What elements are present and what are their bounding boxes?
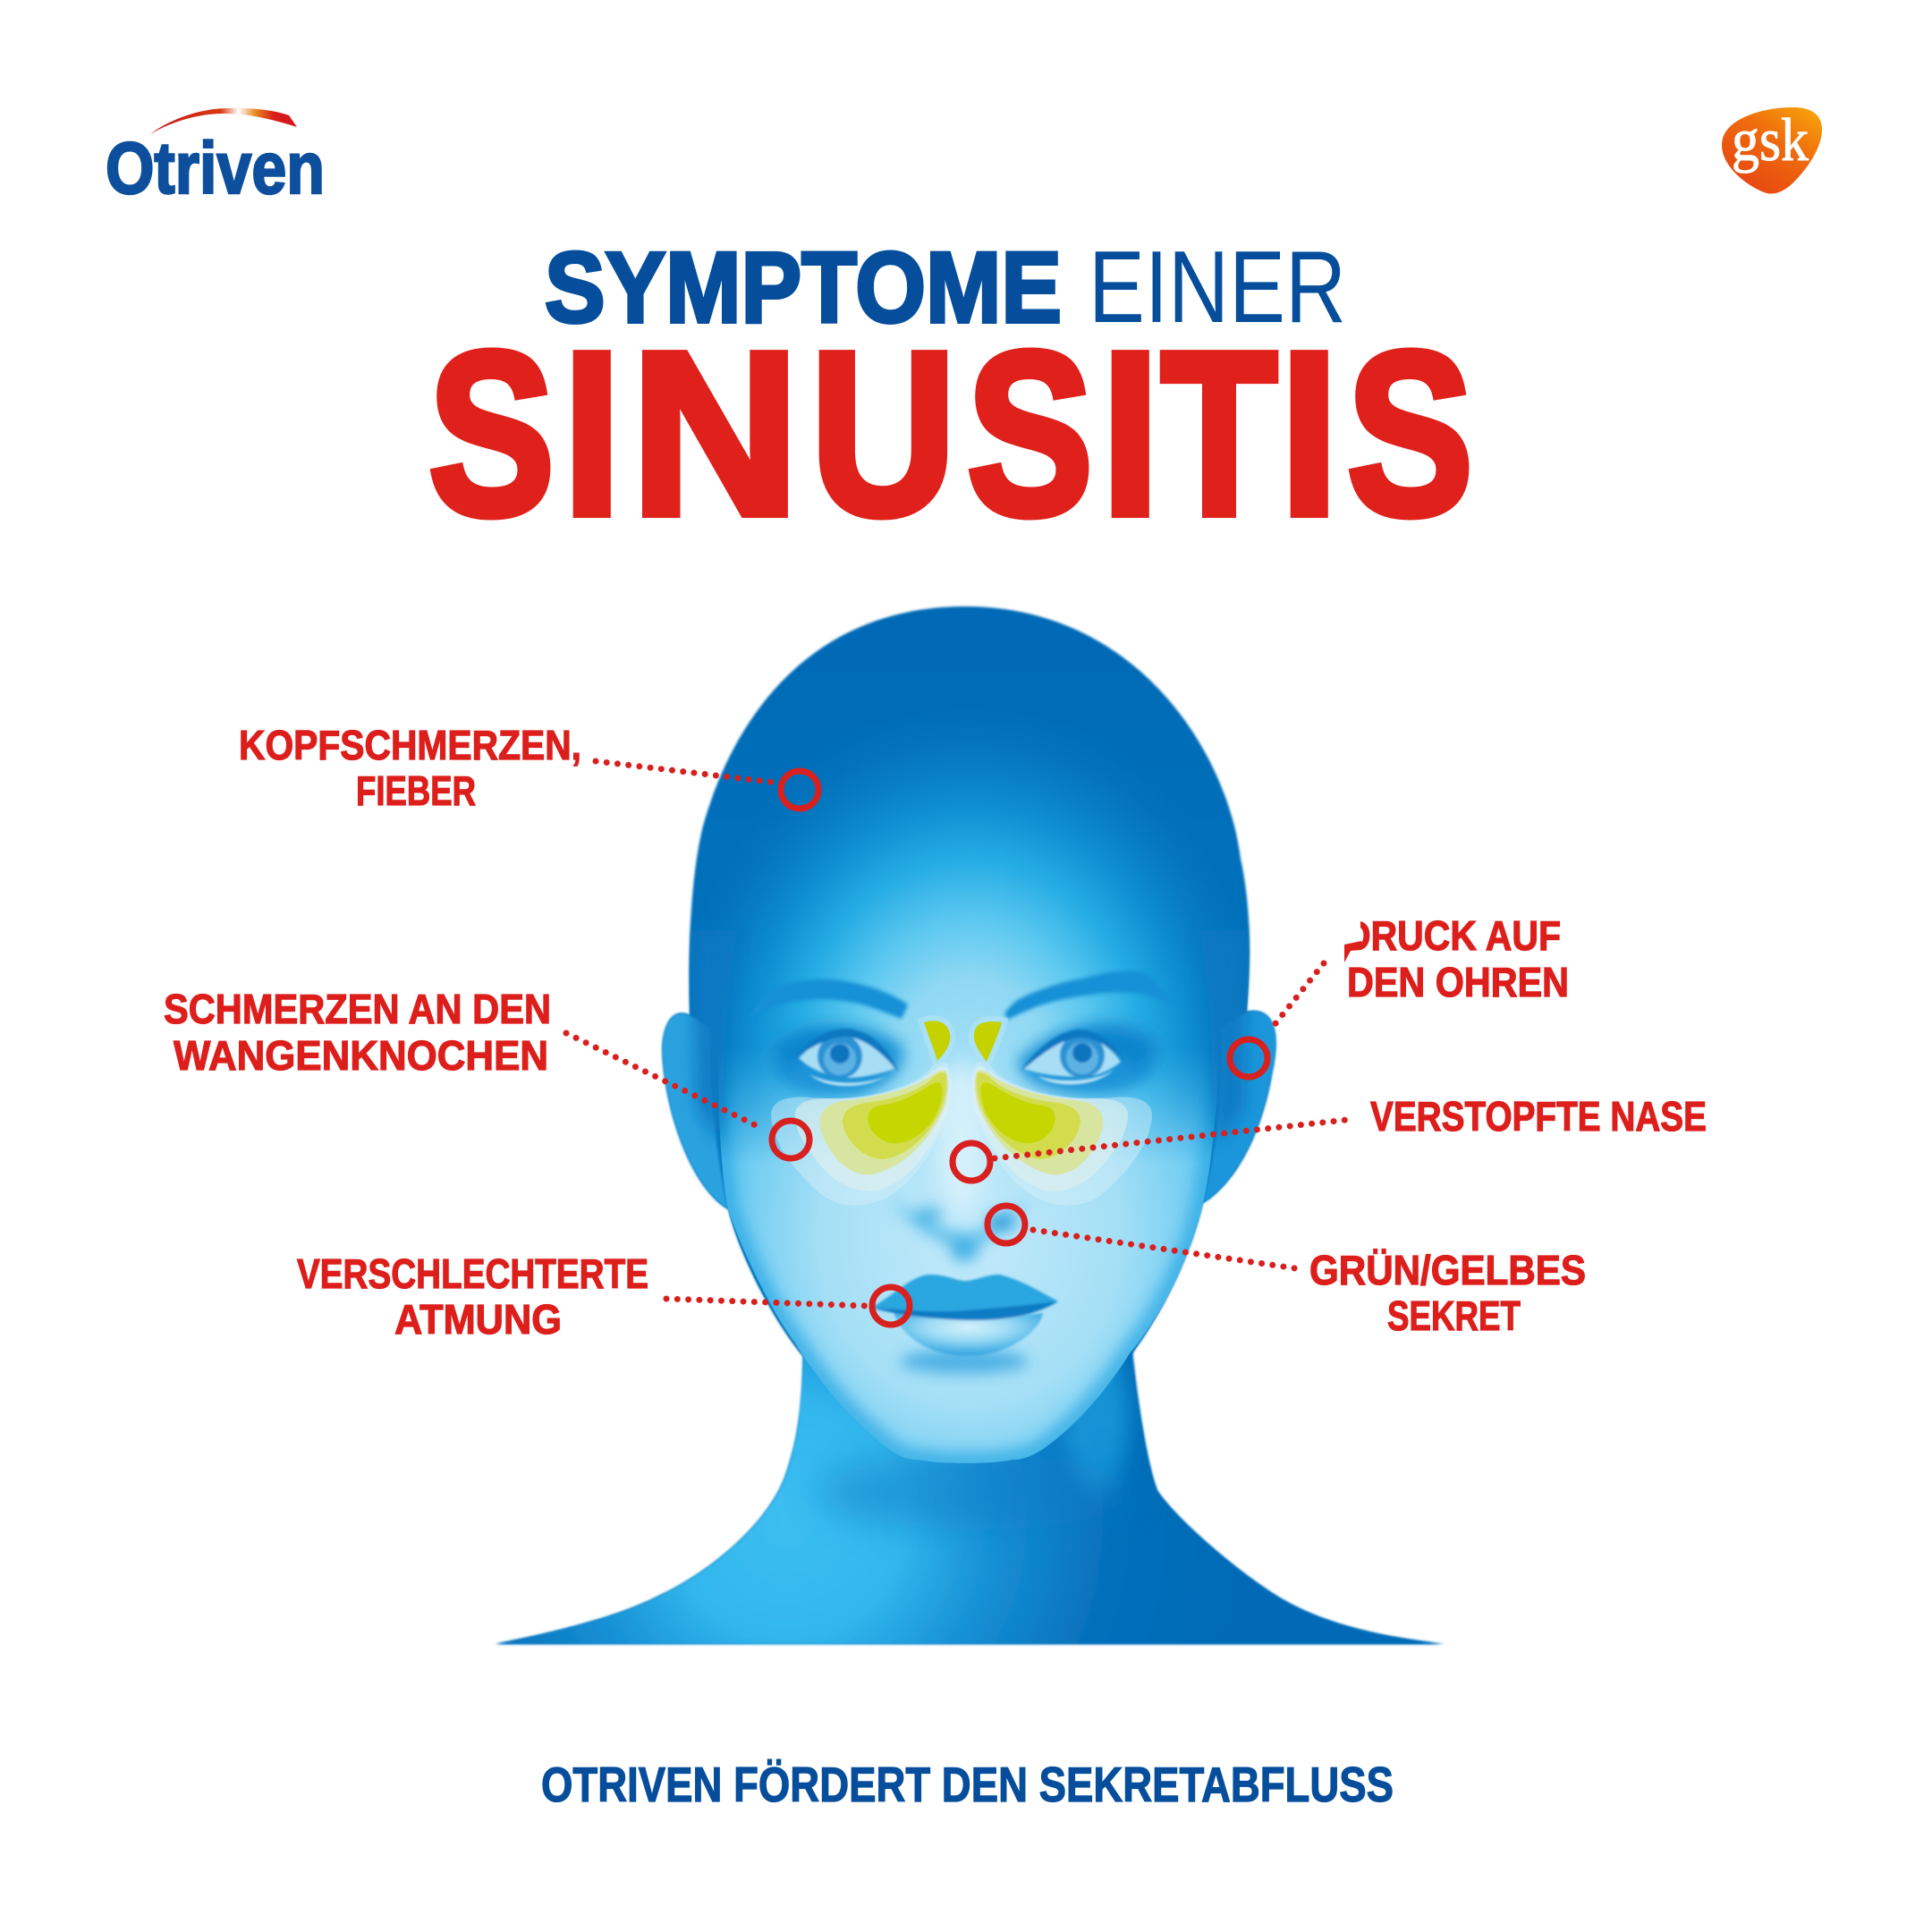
- callout: Schmerzen an den Wangenknochen: SCHMERZEN AN DEN: [164, 986, 551, 1032]
- logo: gsk: gsk: [1732, 106, 1809, 174]
- eye shadow left: [765, 1024, 903, 1096]
- lips: [871, 1275, 1058, 1356]
- title: Sinusitis: T: [1161, 304, 1277, 564]
- shadow below lower lip: [900, 1349, 1029, 1374]
- temple shade left: [687, 925, 726, 1141]
- title: Sinusitis: I: [1101, 304, 1159, 564]
- callout: Kopfschmerzen, Fieber: [239, 722, 818, 814]
- neck and shoulders: [496, 1324, 1444, 1644]
- title: Symptome einer: EINER: [1089, 231, 1346, 344]
- sinuses right: [970, 1062, 1152, 1206]
- callout: Verschlechterte Atmung: ATMUNG: [394, 1296, 562, 1343]
- title: Sinusitis: I: [1280, 304, 1338, 564]
- callout: Schmerzen an den Wangenknochen: [164, 986, 809, 1158]
- title: Sinusitis: I: [563, 304, 621, 564]
- callout: Druck auf den Ohren: DEN OHREN: [1347, 959, 1569, 1005]
- temple shade right: [1210, 926, 1252, 1139]
- logo: Otriven: Otriven: [106, 128, 325, 209]
- callout: Verschlechterte Atmung: [297, 1250, 910, 1343]
- right ear: [1203, 1011, 1275, 1203]
- right neck light: [1063, 1342, 1128, 1494]
- left eye: [794, 1029, 898, 1086]
- callout: Grün/gelbes Sekret: [987, 1206, 1586, 1339]
- right eye: [1021, 1030, 1125, 1084]
- left ear: [663, 1013, 728, 1209]
- callout: Druck auf den Ohren: DRUCK AUF: [1344, 912, 1561, 959]
- eye shadow right: [1018, 1021, 1165, 1095]
- sinuses left: [771, 1062, 953, 1206]
- right eyebrow: [1004, 971, 1171, 1020]
- lower face skin: [719, 1061, 1216, 1463]
- title: Sinusitis: U: [810, 304, 956, 564]
- frontal sinus right: [974, 1021, 1002, 1062]
- illustration: blue head and neck: [496, 606, 1444, 1644]
- frontal sinus left: [924, 1021, 950, 1061]
- nose shadow: [893, 1194, 1027, 1261]
- callout: Verstopfte Nase: VERSTOPFTE NASE: [1370, 1093, 1707, 1140]
- callout: Grün/gelbes Sekret: GRÜN/GELBES: [1309, 1247, 1586, 1293]
- callout: Kopfschmerzen, Fieber: KOPFSCHMERZEN,: [239, 722, 581, 768]
- title: Symptome einer: SYMPTOME: [545, 232, 1062, 343]
- logo: gsk: [1722, 106, 1822, 194]
- title: Sinusitis: S: [1347, 304, 1473, 564]
- callout: Verstopfte Nase: [953, 1093, 1707, 1181]
- head silhouette: [496, 606, 1444, 1644]
- title: Sinusitis: N: [631, 304, 800, 564]
- callout: Schmerzen an den Wangenknochen: WANGENKNOCHEN: [174, 1032, 548, 1079]
- footer claim: OTRIVEN FÖRDERT DEN SEKRETABFLUSS: [541, 1757, 1394, 1812]
- callout: Druck auf den Ohren: [1230, 912, 1569, 1077]
- callout: Grün/gelbes Sekret: SEKRET: [1387, 1292, 1521, 1339]
- callout: Verschlechterte Atmung: VERSCHLECHTERTE: [297, 1250, 648, 1297]
- title: Sinusitis: S: [428, 304, 555, 564]
- nose bridge highlight: [935, 1060, 988, 1212]
- shadow under chin: [818, 1451, 1008, 1537]
- title: Sinusitis: S: [967, 304, 1093, 564]
- callout: Kopfschmerzen, Fieber: FIEBER: [356, 767, 476, 814]
- forehead glow: [673, 744, 1268, 1364]
- left eyebrow: [750, 979, 908, 1019]
